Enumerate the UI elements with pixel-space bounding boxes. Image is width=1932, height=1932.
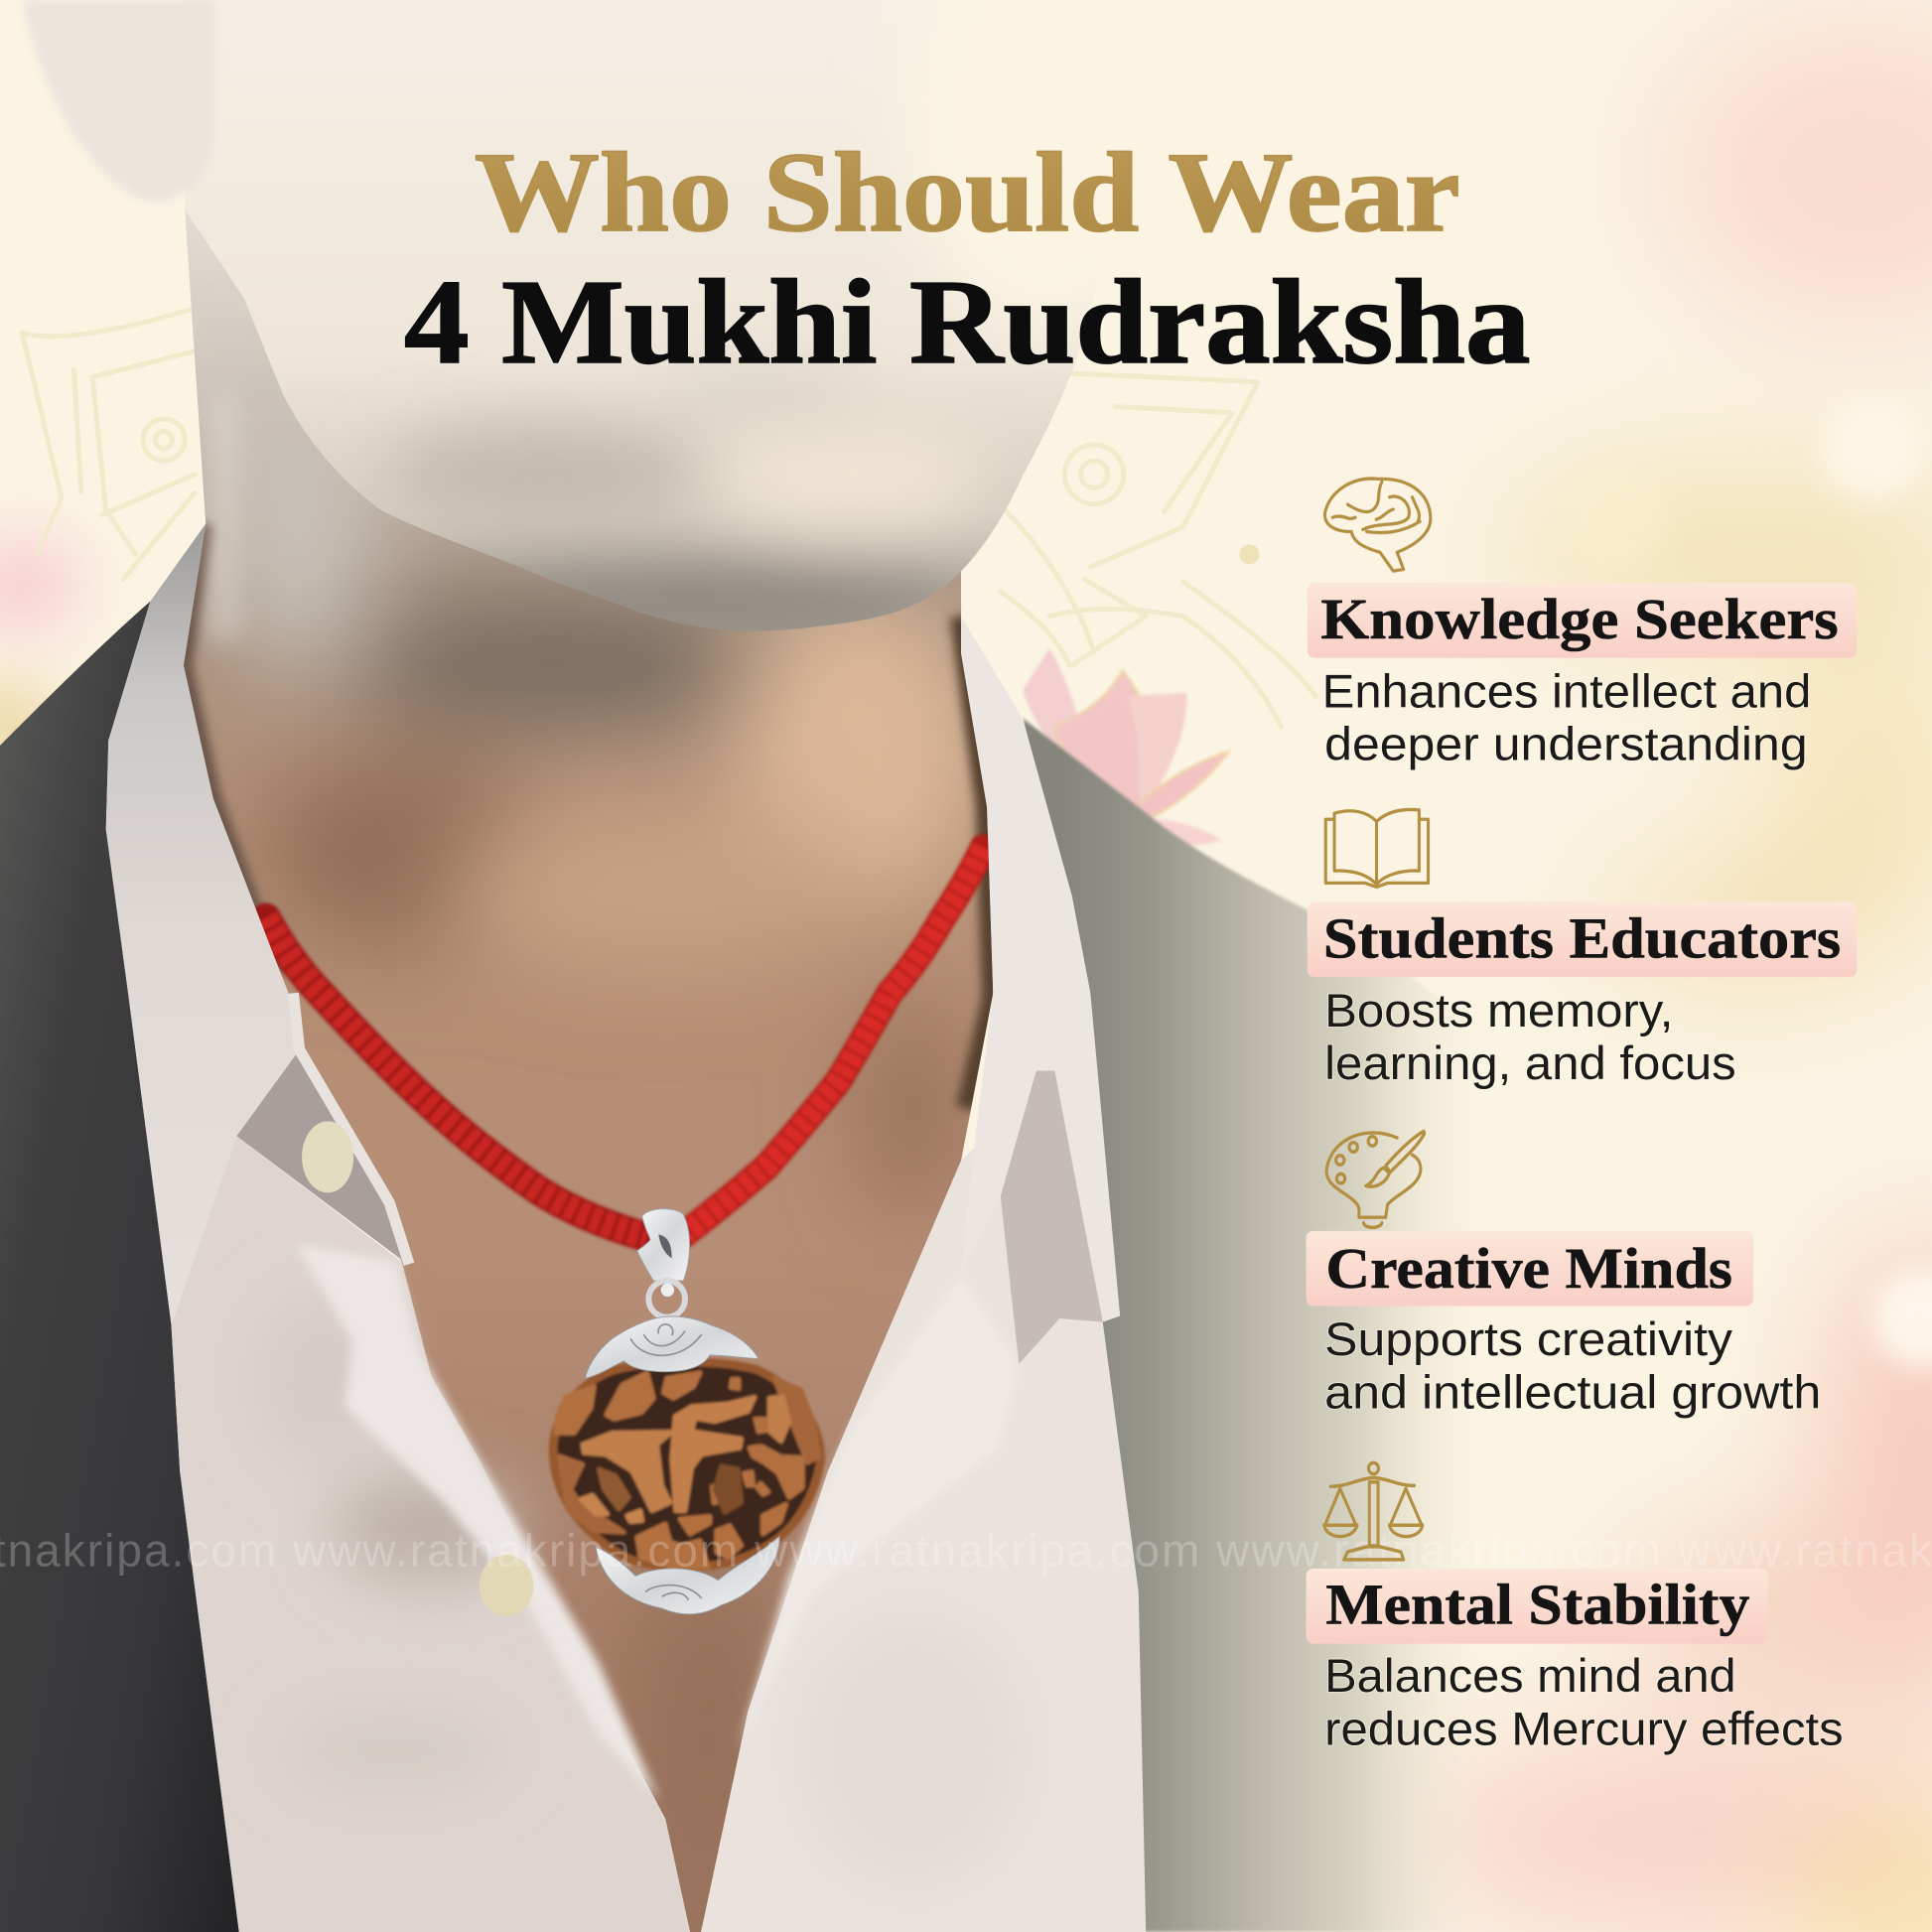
- neck highlight strip: [209, 394, 239, 640]
- pendant ring: [648, 1281, 685, 1317]
- heading: Creative Minds: [1325, 1236, 1732, 1301]
- ear: [22, 0, 215, 202]
- description: [1324, 984, 1736, 1089]
- panel: Mental Stability: [1307, 1462, 1844, 1754]
- highlight band: [1308, 901, 1857, 977]
- panel: Students Educators: [1308, 809, 1857, 1089]
- mandala line art left: [22, 308, 195, 579]
- shirt lapel highlight: [297, 1244, 659, 1801]
- panel: Knowledge Seekers: [1308, 479, 1857, 770]
- description: and intellectual growth: [1324, 1366, 1821, 1419]
- shirt placket: [740, 1274, 1019, 1749]
- pendant top cap: [585, 1316, 759, 1378]
- description: Supports creativity: [1324, 1312, 1732, 1365]
- collar left edge: [293, 993, 409, 1264]
- description: reduces Mercury effects: [1324, 1702, 1844, 1754]
- description: [1322, 664, 1811, 770]
- icon: balance scales: [1324, 1462, 1423, 1560]
- lotus flower: [1023, 648, 1228, 847]
- shadow beside left collar: [184, 523, 277, 973]
- shirt body left: [172, 1136, 690, 1932]
- pendant bale: [637, 1209, 690, 1281]
- panel: Creative Minds: [1307, 1131, 1821, 1419]
- collar right underside: [1001, 1070, 1103, 1364]
- highlight band: [1307, 1569, 1768, 1644]
- description: Boosts memory,: [1324, 984, 1673, 1036]
- description: Enhances intellect and: [1322, 664, 1811, 717]
- neck and chest skin: [173, 209, 1011, 1932]
- highlight band: [1307, 1231, 1753, 1307]
- title line 1: Who Should Wear: [475, 129, 1460, 255]
- pendant ball: [661, 1284, 674, 1297]
- description: learning, and focus: [1324, 1036, 1736, 1089]
- description: Balances mind and: [1324, 1649, 1736, 1702]
- jacket left: [0, 602, 239, 1932]
- description: [1324, 1649, 1844, 1754]
- shirt button lower: [480, 1555, 533, 1616]
- rudraksha pendant: [553, 1209, 821, 1614]
- heading: Knowledge Seekers: [1320, 587, 1839, 651]
- shirt button upper: [302, 1121, 353, 1192]
- icon: open book: [1325, 809, 1429, 887]
- icon: brain: [1324, 479, 1431, 571]
- jacket right: [1023, 719, 1478, 1932]
- description: deeper understanding: [1324, 718, 1808, 770]
- highlight band: [1308, 583, 1857, 658]
- collar left underside: [236, 1049, 404, 1262]
- description: [1324, 1312, 1821, 1419]
- rudraksha bead: [553, 1362, 821, 1568]
- heading: Mental Stability: [1325, 1573, 1749, 1637]
- red cord: [266, 848, 983, 1237]
- face fading into the background: [185, 54, 1080, 631]
- collar left: [106, 523, 409, 1324]
- shirt body right: [701, 1070, 1146, 1932]
- icon: palette lightbulb: [1326, 1131, 1425, 1227]
- heading: Students Educators: [1323, 905, 1841, 970]
- shadow beside right collar: [961, 617, 993, 1109]
- collar right: [961, 617, 1120, 1364]
- title line 2: 4 Mukhi Rudraksha: [404, 256, 1530, 389]
- pendant bottom cap: [596, 1536, 779, 1614]
- mandala line art right: [1001, 373, 1315, 727]
- title: [404, 129, 1530, 389]
